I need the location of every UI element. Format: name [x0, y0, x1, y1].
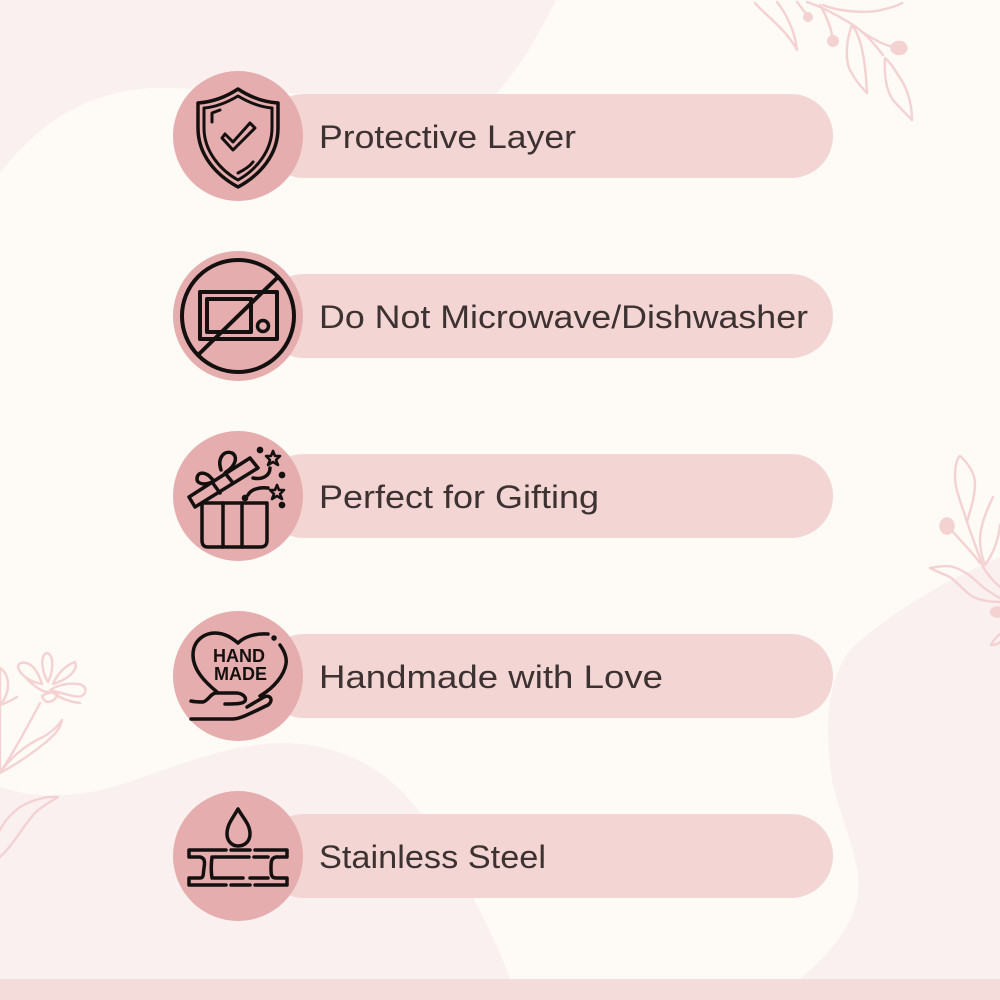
badge 4 — [173, 611, 303, 741]
pill 5 — [262, 814, 833, 898]
row 1: Protective Layer — [173, 71, 833, 201]
label 5: Stainless Steel — [319, 839, 546, 875]
pill 1 — [262, 94, 833, 178]
icon: handmade heart: MADE — [214, 664, 267, 684]
badge 2 — [173, 251, 303, 381]
icon: shield — [198, 89, 278, 187]
badge 3 — [173, 431, 303, 561]
badge 1 — [173, 71, 303, 201]
label 4: Handmade with Love — [319, 659, 663, 695]
pill 3 — [262, 454, 833, 538]
floral right — [930, 456, 1000, 645]
icon: handmade heart: HAND — [213, 646, 265, 666]
label 3: Perfect for Gifting — [319, 479, 599, 515]
row 4: Handmade with Love — [173, 611, 833, 741]
icon: no microwave — [182, 260, 294, 372]
row 3: Perfect for Gifting — [173, 431, 833, 561]
icon: steel beam with drop — [189, 809, 287, 885]
floral left — [0, 653, 85, 857]
pill 2 — [262, 274, 833, 358]
label 1: Protective Layer — [319, 119, 576, 155]
badge 5 — [173, 791, 303, 921]
pill 4 — [262, 634, 833, 718]
row 5: Stainless Steel — [173, 791, 833, 921]
floral top right — [755, 2, 912, 120]
bottom band — [0, 979, 1000, 1000]
row 2: Do Not Microwave — [173, 251, 833, 381]
label 2: Do Not Microwave/Dishwasher — [319, 299, 808, 335]
icon: handmade heart — [191, 633, 286, 719]
icon: gift — [189, 448, 284, 547]
